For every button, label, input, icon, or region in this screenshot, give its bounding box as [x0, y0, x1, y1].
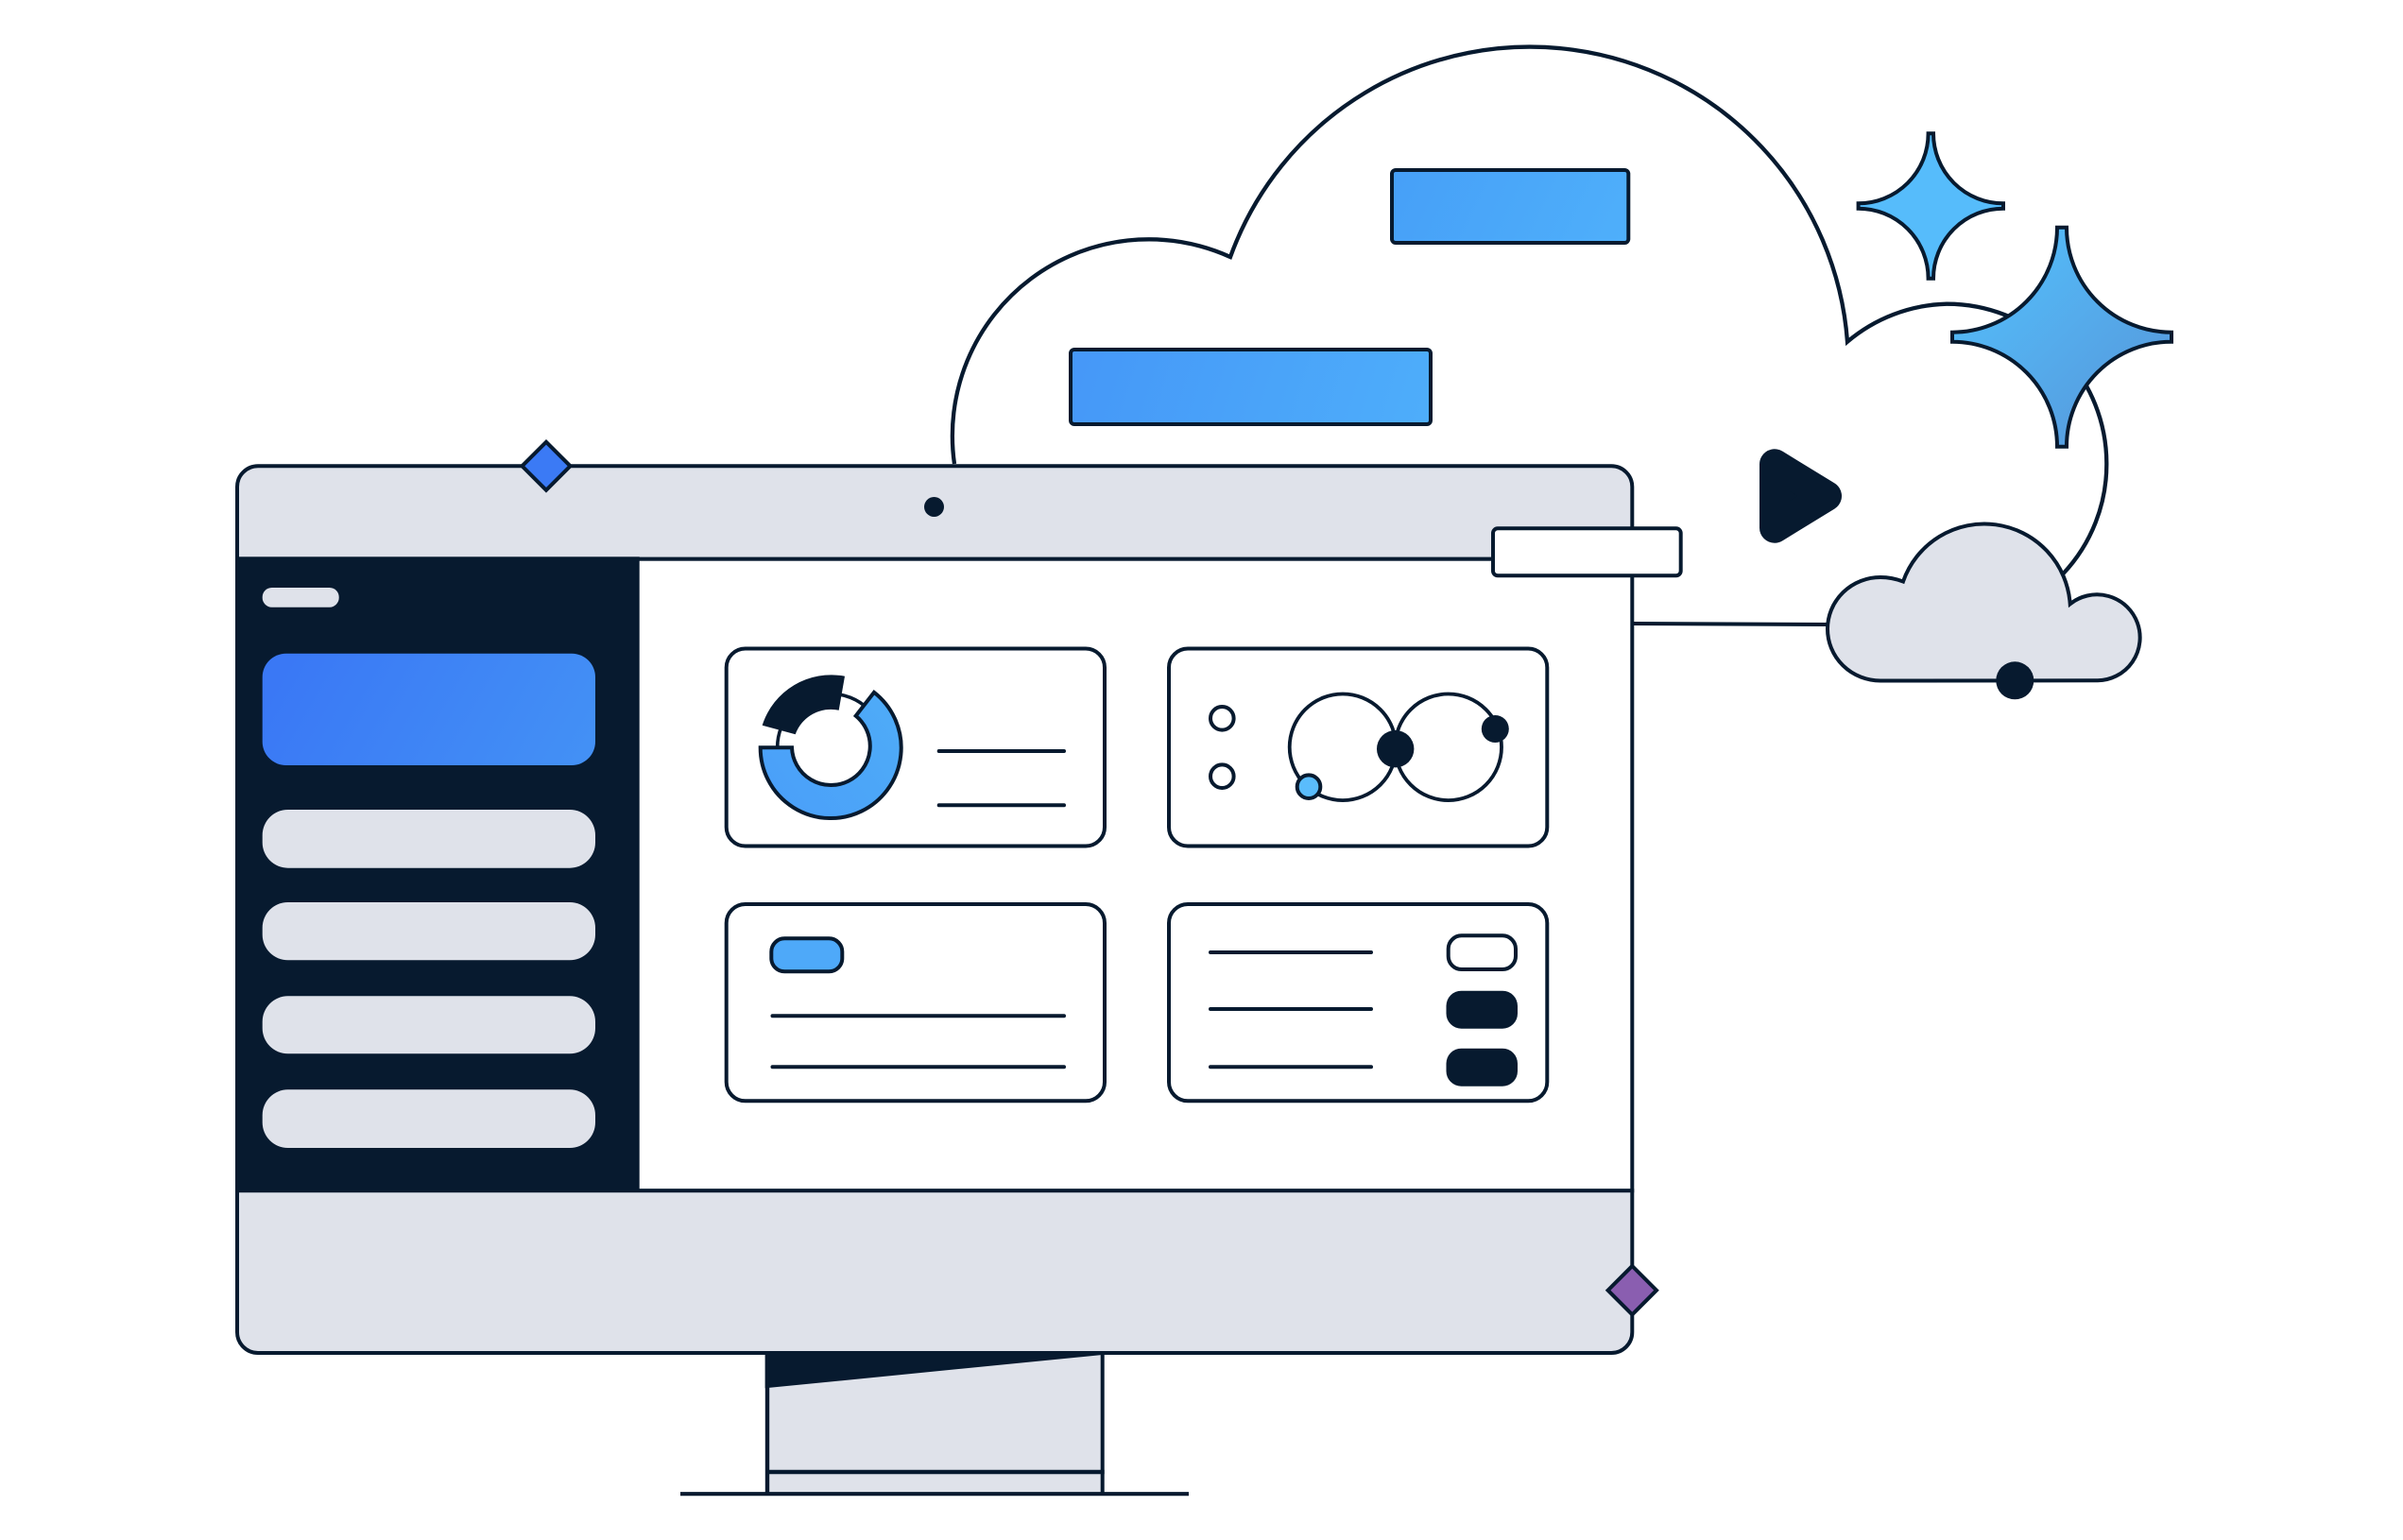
icon: blue diamond: [522, 442, 571, 490]
donut dark segment: [763, 675, 845, 734]
panel: donut chart card: [727, 648, 1105, 847]
blue node: [1297, 775, 1320, 798]
legend dot 1: [1210, 707, 1234, 730]
stand shadow wedge: [765, 1351, 1103, 1388]
monitor stand: [680, 1351, 1189, 1496]
white label box on monitor corner: [1493, 528, 1681, 575]
small grey cloud: [1828, 524, 2140, 699]
sidebar: [235, 556, 640, 1191]
right node: [1482, 715, 1509, 743]
sidebar logo pill: [263, 588, 339, 607]
monitor bottom bezel: [237, 1190, 1632, 1353]
outline toggle: [1449, 935, 1516, 969]
sidebar menu item 1: [263, 810, 595, 868]
large background cloud: [953, 47, 2106, 573]
text line 2: [939, 803, 1064, 807]
dark toggle 2: [1446, 1049, 1518, 1087]
text line 1: [773, 1014, 1064, 1018]
panel: linked circles card: [1169, 648, 1547, 847]
sidebar menu item 2: [263, 902, 595, 960]
row line 3: [1210, 1065, 1371, 1069]
panel: blue tag card: [727, 904, 1105, 1101]
donut clearing for centre: [792, 709, 869, 786]
icon: purple diamond: [1608, 1266, 1656, 1314]
icon: large sparkle star: [1952, 228, 2171, 447]
monitor screen: [624, 559, 1632, 1190]
monitor top bezel: [237, 466, 1632, 559]
legend dot 2: [1210, 764, 1234, 788]
donut blue segment: [761, 693, 901, 818]
icon: small sparkle star: [1859, 133, 2003, 279]
dark toggle 1: [1446, 991, 1518, 1029]
row line 1: [1210, 950, 1371, 954]
right ring: [1395, 693, 1502, 800]
text line 1: [939, 749, 1064, 753]
cloud node dot: [1996, 661, 2034, 699]
sidebar menu item 3: [263, 996, 595, 1053]
webcam dot: [924, 497, 944, 517]
centre node: [1377, 730, 1414, 767]
row line 2: [1210, 1007, 1371, 1011]
icon: play triangle: [1775, 464, 1827, 528]
sidebar active button: [263, 654, 595, 765]
blue tag: [771, 938, 842, 971]
text line 2: [773, 1065, 1064, 1069]
monitor: [235, 466, 1632, 1353]
blue bar: upper cloud: [1392, 170, 1628, 243]
floor line: [680, 1492, 1189, 1496]
connector line: monitor to small cloud: [1632, 624, 1829, 625]
sidebar menu item 4: [263, 1089, 595, 1148]
panel: list with toggles card: [1169, 904, 1547, 1101]
blue bar: lower cloud: [1071, 350, 1431, 424]
donut thin ring: [778, 693, 884, 800]
left ring: [1290, 693, 1396, 800]
